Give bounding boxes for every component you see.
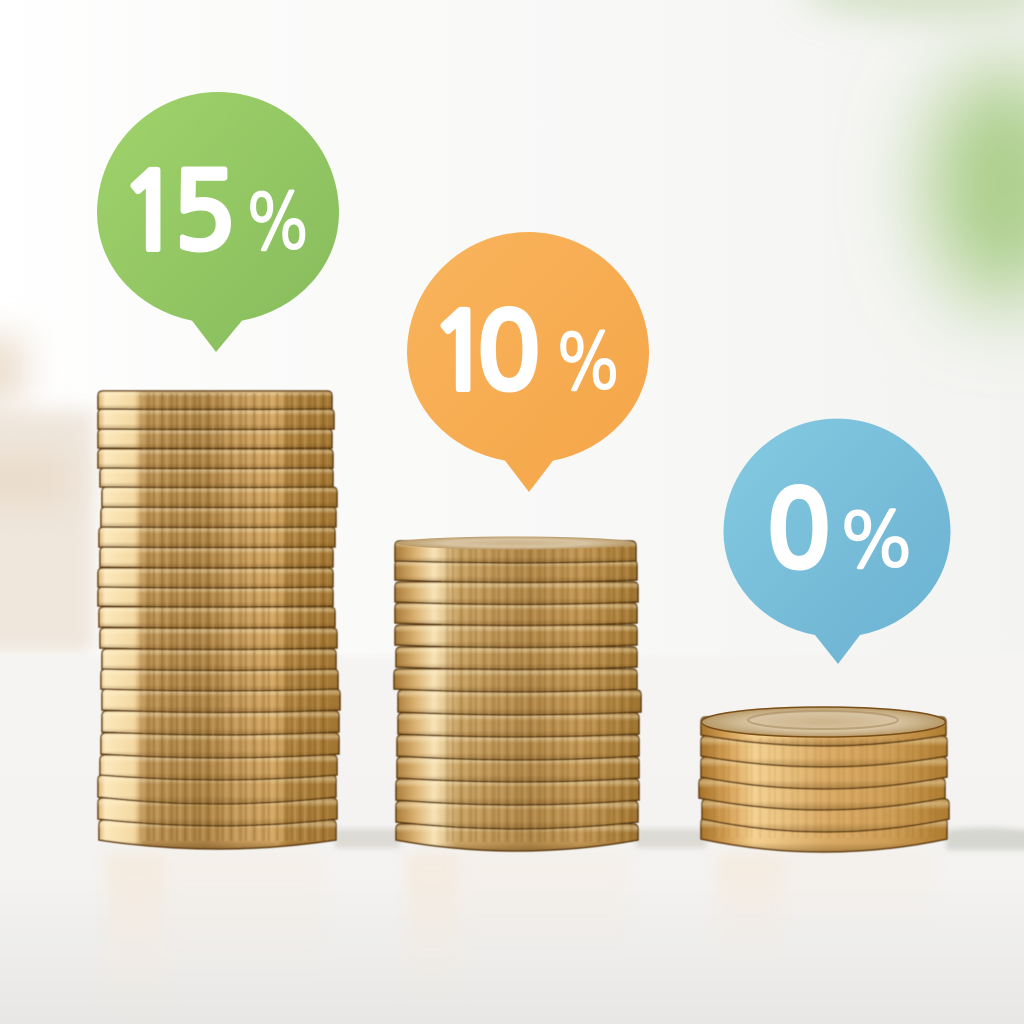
bubble: 15% green <box>97 92 339 352</box>
bubble: 10% orange <box>407 232 649 492</box>
label: 10% <box>428 300 623 407</box>
label: 10%: 0 <box>476 300 541 407</box>
label: 15%: % <box>243 185 313 261</box>
label: 15%: 5 <box>171 160 236 267</box>
label: 10%: 1 <box>428 300 493 407</box>
label: 0%: % <box>836 503 917 578</box>
label: 0%: 0 <box>766 478 831 585</box>
coin stack: 10% (medium) <box>394 536 641 851</box>
label: 0% <box>766 478 917 585</box>
label: 15% <box>118 160 313 267</box>
bubble: 0% blue <box>724 419 951 664</box>
coin stack: 0% (short) <box>699 707 949 852</box>
label: 10%: % <box>553 325 623 401</box>
label: 15%: 1 <box>118 160 183 267</box>
coin stack: 15% (tall) <box>98 391 340 849</box>
